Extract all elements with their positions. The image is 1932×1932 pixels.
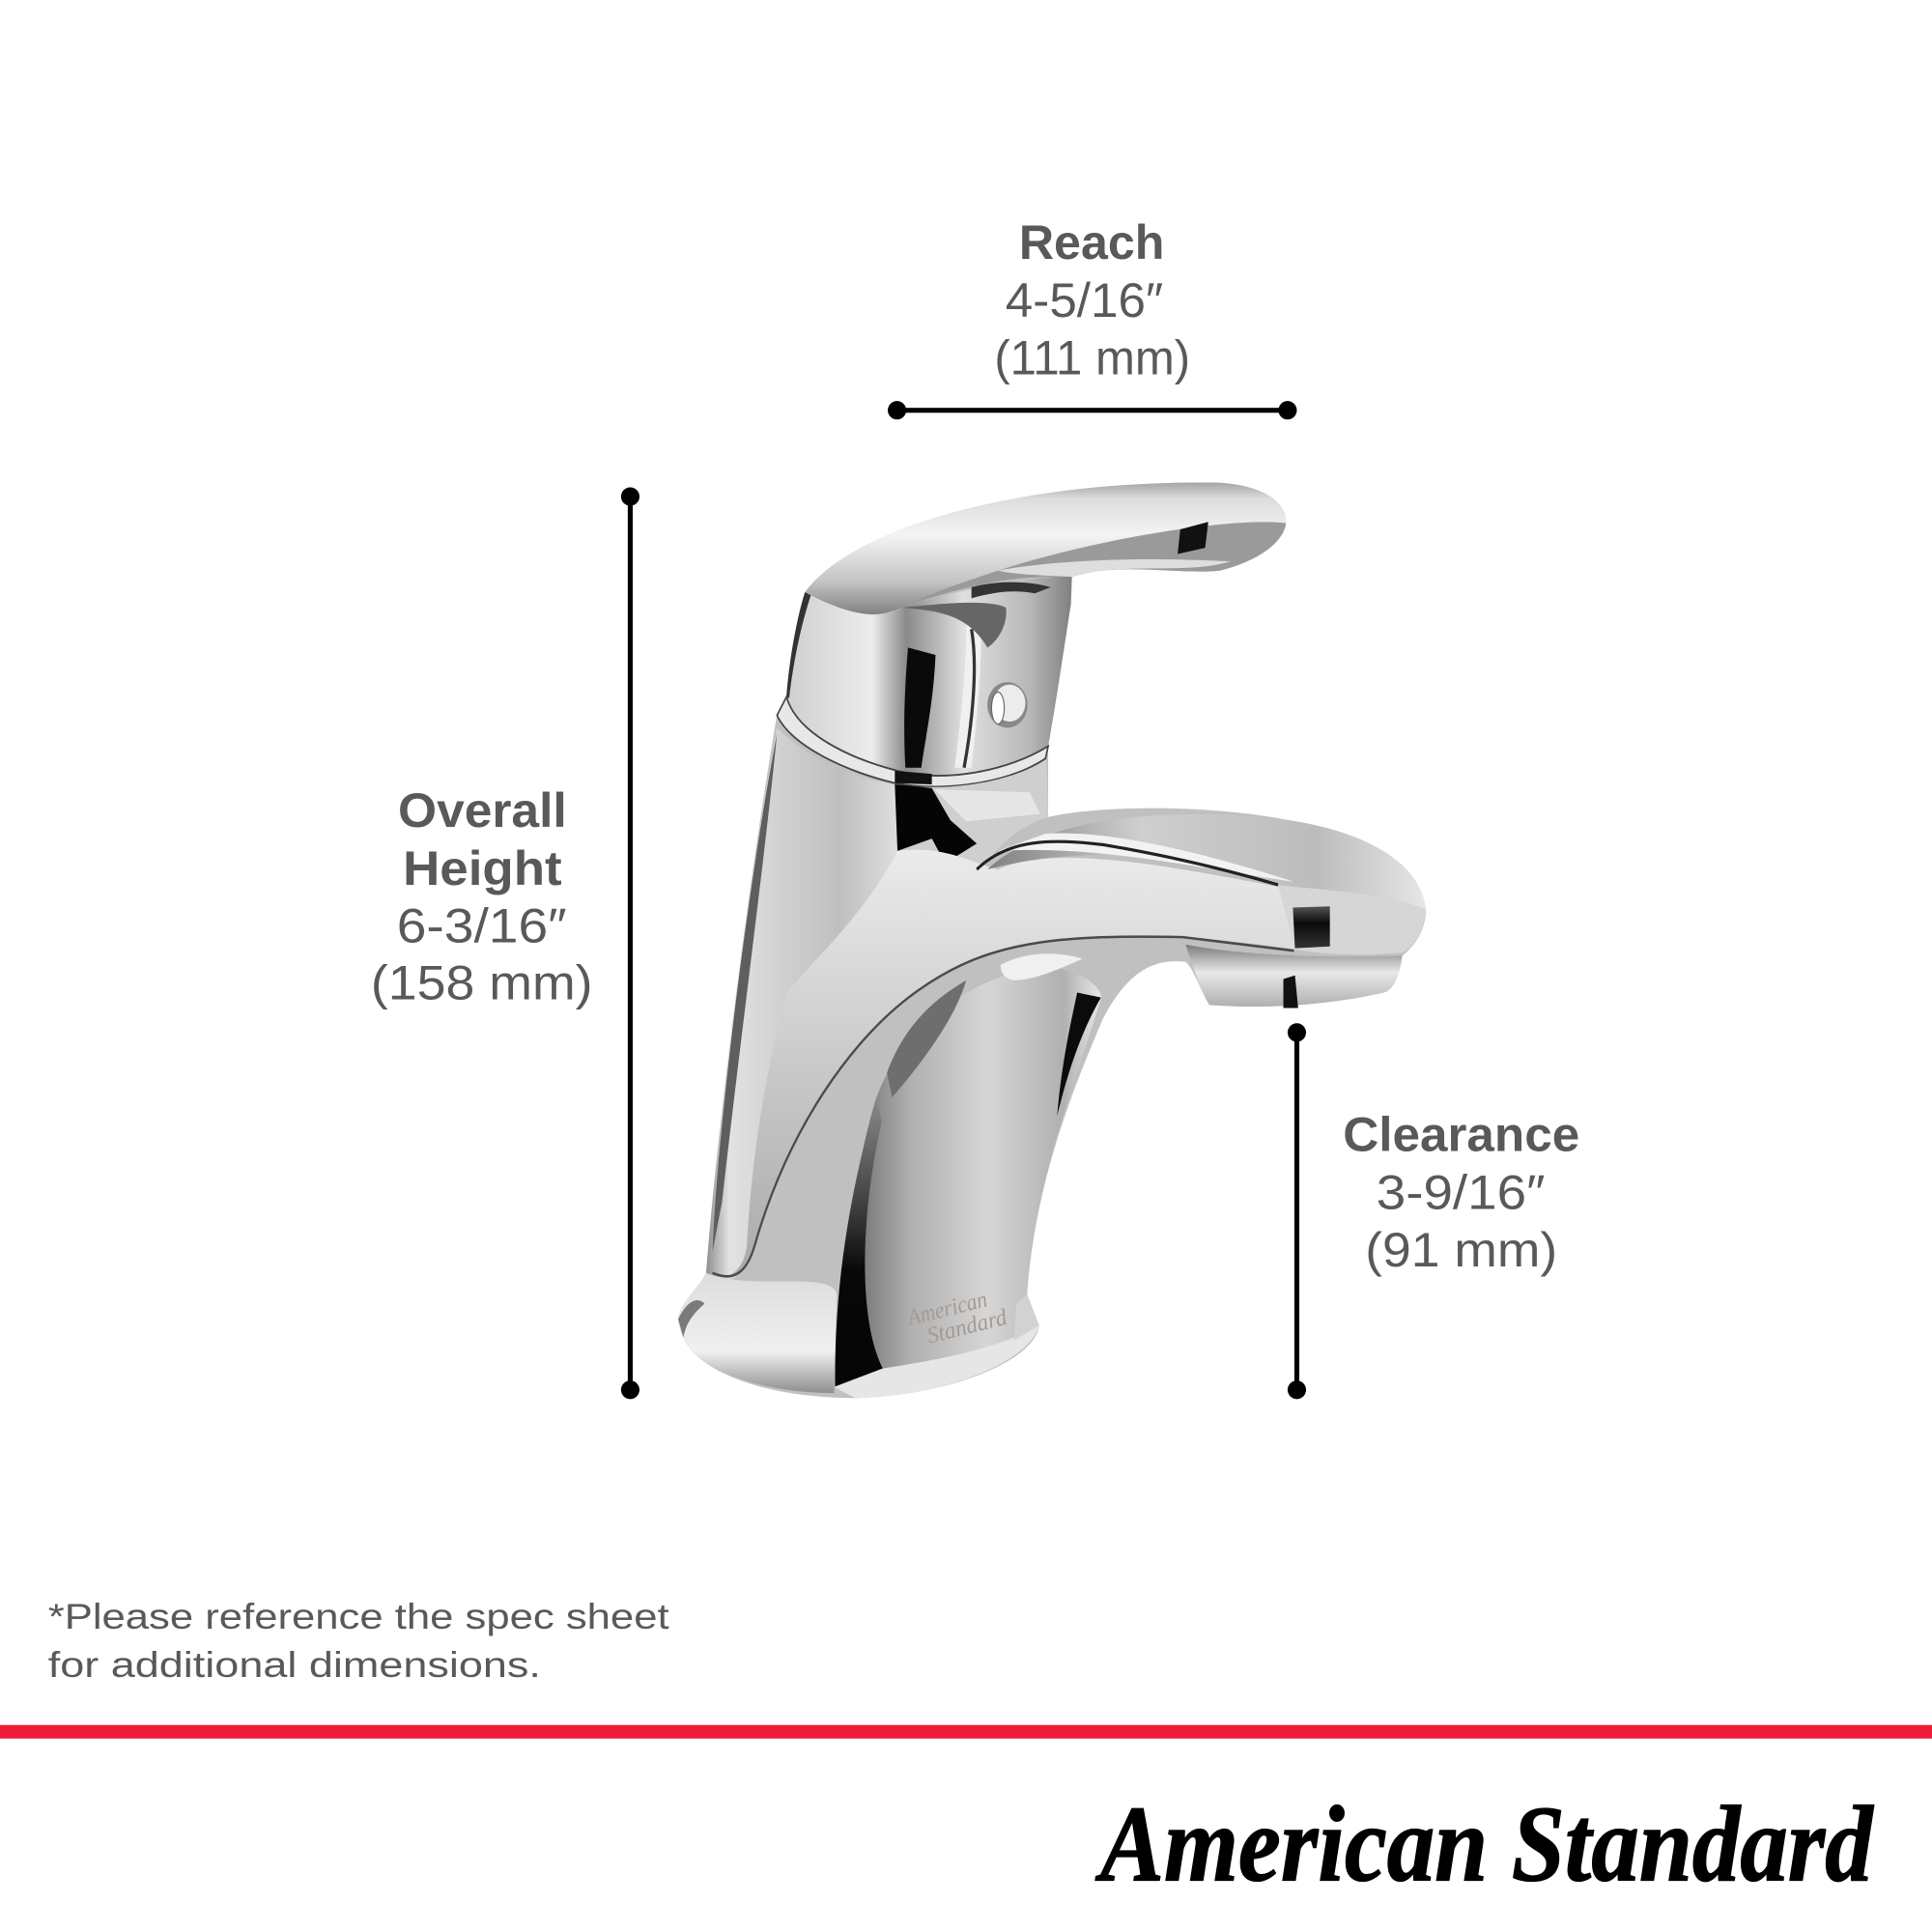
overall height label: Height (403, 841, 562, 895)
reach label (994, 215, 1190, 385)
clearance label (1343, 1107, 1579, 1277)
top plate highlight line (998, 833, 1293, 882)
overall height label (371, 783, 593, 1009)
pedestal under spout (848, 967, 1101, 1396)
clearance label: (91 mm) (1365, 1223, 1557, 1277)
reach label: 4-5/16″ (1006, 273, 1163, 327)
lever handle top (805, 482, 1286, 614)
handle underside shine (903, 522, 1286, 608)
small engraved logo on faucet: Standard (924, 1304, 1010, 1350)
small engraved logo on faucet: American (903, 1286, 990, 1331)
small engraved logo on faucet (903, 1283, 1010, 1353)
inner arch line (713, 937, 1293, 1276)
footnote (48, 1597, 669, 1685)
footnote: for additional dimensions. (48, 1645, 541, 1685)
footnote: *Please reference the spec sheet (48, 1597, 669, 1636)
handle left facet (786, 592, 810, 698)
faucet photo (678, 482, 1426, 1398)
aerator (1185, 945, 1403, 1007)
clearance label: 3-9/16″ (1377, 1165, 1545, 1219)
reach label: Reach (1019, 215, 1164, 270)
handle tip dark highlight (1178, 522, 1208, 554)
set screw button (987, 682, 1028, 727)
spout nose black reflection (1293, 906, 1330, 949)
overall height label: Overall (398, 783, 567, 838)
collar ring (777, 696, 1048, 786)
faucet base foot (678, 1273, 837, 1393)
dimension: reach (888, 215, 1296, 419)
faucet column (706, 727, 897, 1280)
spout arch (715, 850, 1295, 1276)
reach dimension line (888, 401, 1296, 419)
reach label: (111 mm) (994, 331, 1190, 385)
handle front block (786, 577, 1072, 776)
black reflection below collar (895, 784, 977, 864)
spout top plate (987, 814, 1426, 909)
overall height dimension line (621, 487, 639, 1399)
handle neck stripes (954, 623, 981, 768)
handle neck black reflection (904, 647, 935, 768)
spout nose band (1278, 885, 1426, 954)
red divider bar (0, 1725, 1932, 1739)
neck below collar (895, 759, 1048, 875)
pedestal reflections (1001, 953, 1083, 980)
overall height label: (158 mm) (371, 955, 593, 1009)
dimension: clearance (1288, 1023, 1579, 1399)
clearance label: Clearance (1343, 1107, 1579, 1161)
clearance dimension line (1288, 1023, 1306, 1399)
faucet silhouette (678, 482, 1426, 1398)
overall height label: 6-3/16″ (397, 899, 567, 953)
dimension: overall height (371, 487, 639, 1399)
column dark edge streak (713, 734, 777, 1251)
